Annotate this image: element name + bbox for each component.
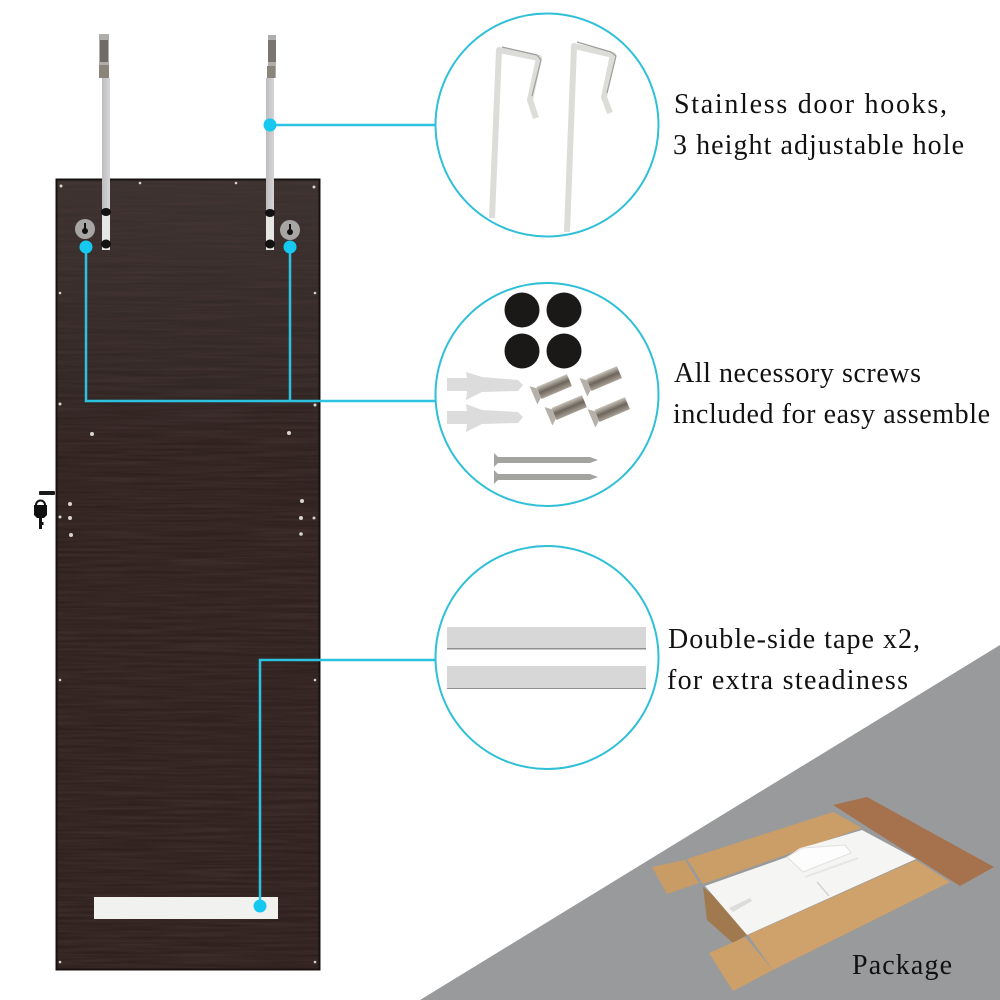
text: tape: [667, 624, 920, 696]
foam packing: [705, 830, 916, 935]
adhesive strip on panel: [94, 897, 278, 919]
text: screws: [673, 358, 990, 430]
front-left flap: [709, 937, 773, 991]
front flap: [748, 860, 950, 970]
icon: felt pads: [504, 292, 582, 368]
circle: door hooks detail: [436, 14, 658, 236]
connector: hook to circle: [264, 118, 436, 132]
text: tape: Double-side tape x2,: [668, 624, 920, 655]
icon: tape strips: [447, 627, 646, 689]
package label: Package: [852, 950, 952, 981]
text: tape: for extra steadiness: [667, 665, 908, 696]
icon: left hook: [492, 47, 541, 218]
text: screws: All necessory screws: [674, 358, 921, 389]
icon: right hook: [567, 42, 616, 232]
text: door hooks: Stainless door hooks,: [674, 89, 947, 120]
icon: long screws: [494, 453, 598, 484]
text: door hooks: [673, 89, 964, 161]
cabinet back panel: [56, 179, 320, 970]
circle: screws detail: [436, 283, 658, 506]
right door hook: [265, 35, 276, 250]
box side: [703, 887, 747, 943]
rear flap: [687, 812, 862, 884]
left flap: [652, 860, 699, 894]
dark lid flap: [833, 797, 994, 886]
left door hook: [99, 34, 111, 250]
left keyhole plate: [75, 219, 95, 239]
icon: machine screws: [530, 363, 631, 428]
connector: keyholes to circle: [80, 240, 436, 401]
background grey triangle: [420, 645, 1000, 1000]
lock and key: [34, 491, 55, 529]
text: door hooks: 3 height adjustable hole: [673, 130, 964, 161]
connector: strip to circle: [254, 660, 436, 912]
icon: wall anchors: [447, 372, 523, 432]
package photo: [652, 797, 994, 991]
circle: double-side tape detail: [436, 546, 658, 769]
right keyhole plate: [280, 220, 300, 240]
text: screws: included for easy assemble: [673, 399, 990, 430]
